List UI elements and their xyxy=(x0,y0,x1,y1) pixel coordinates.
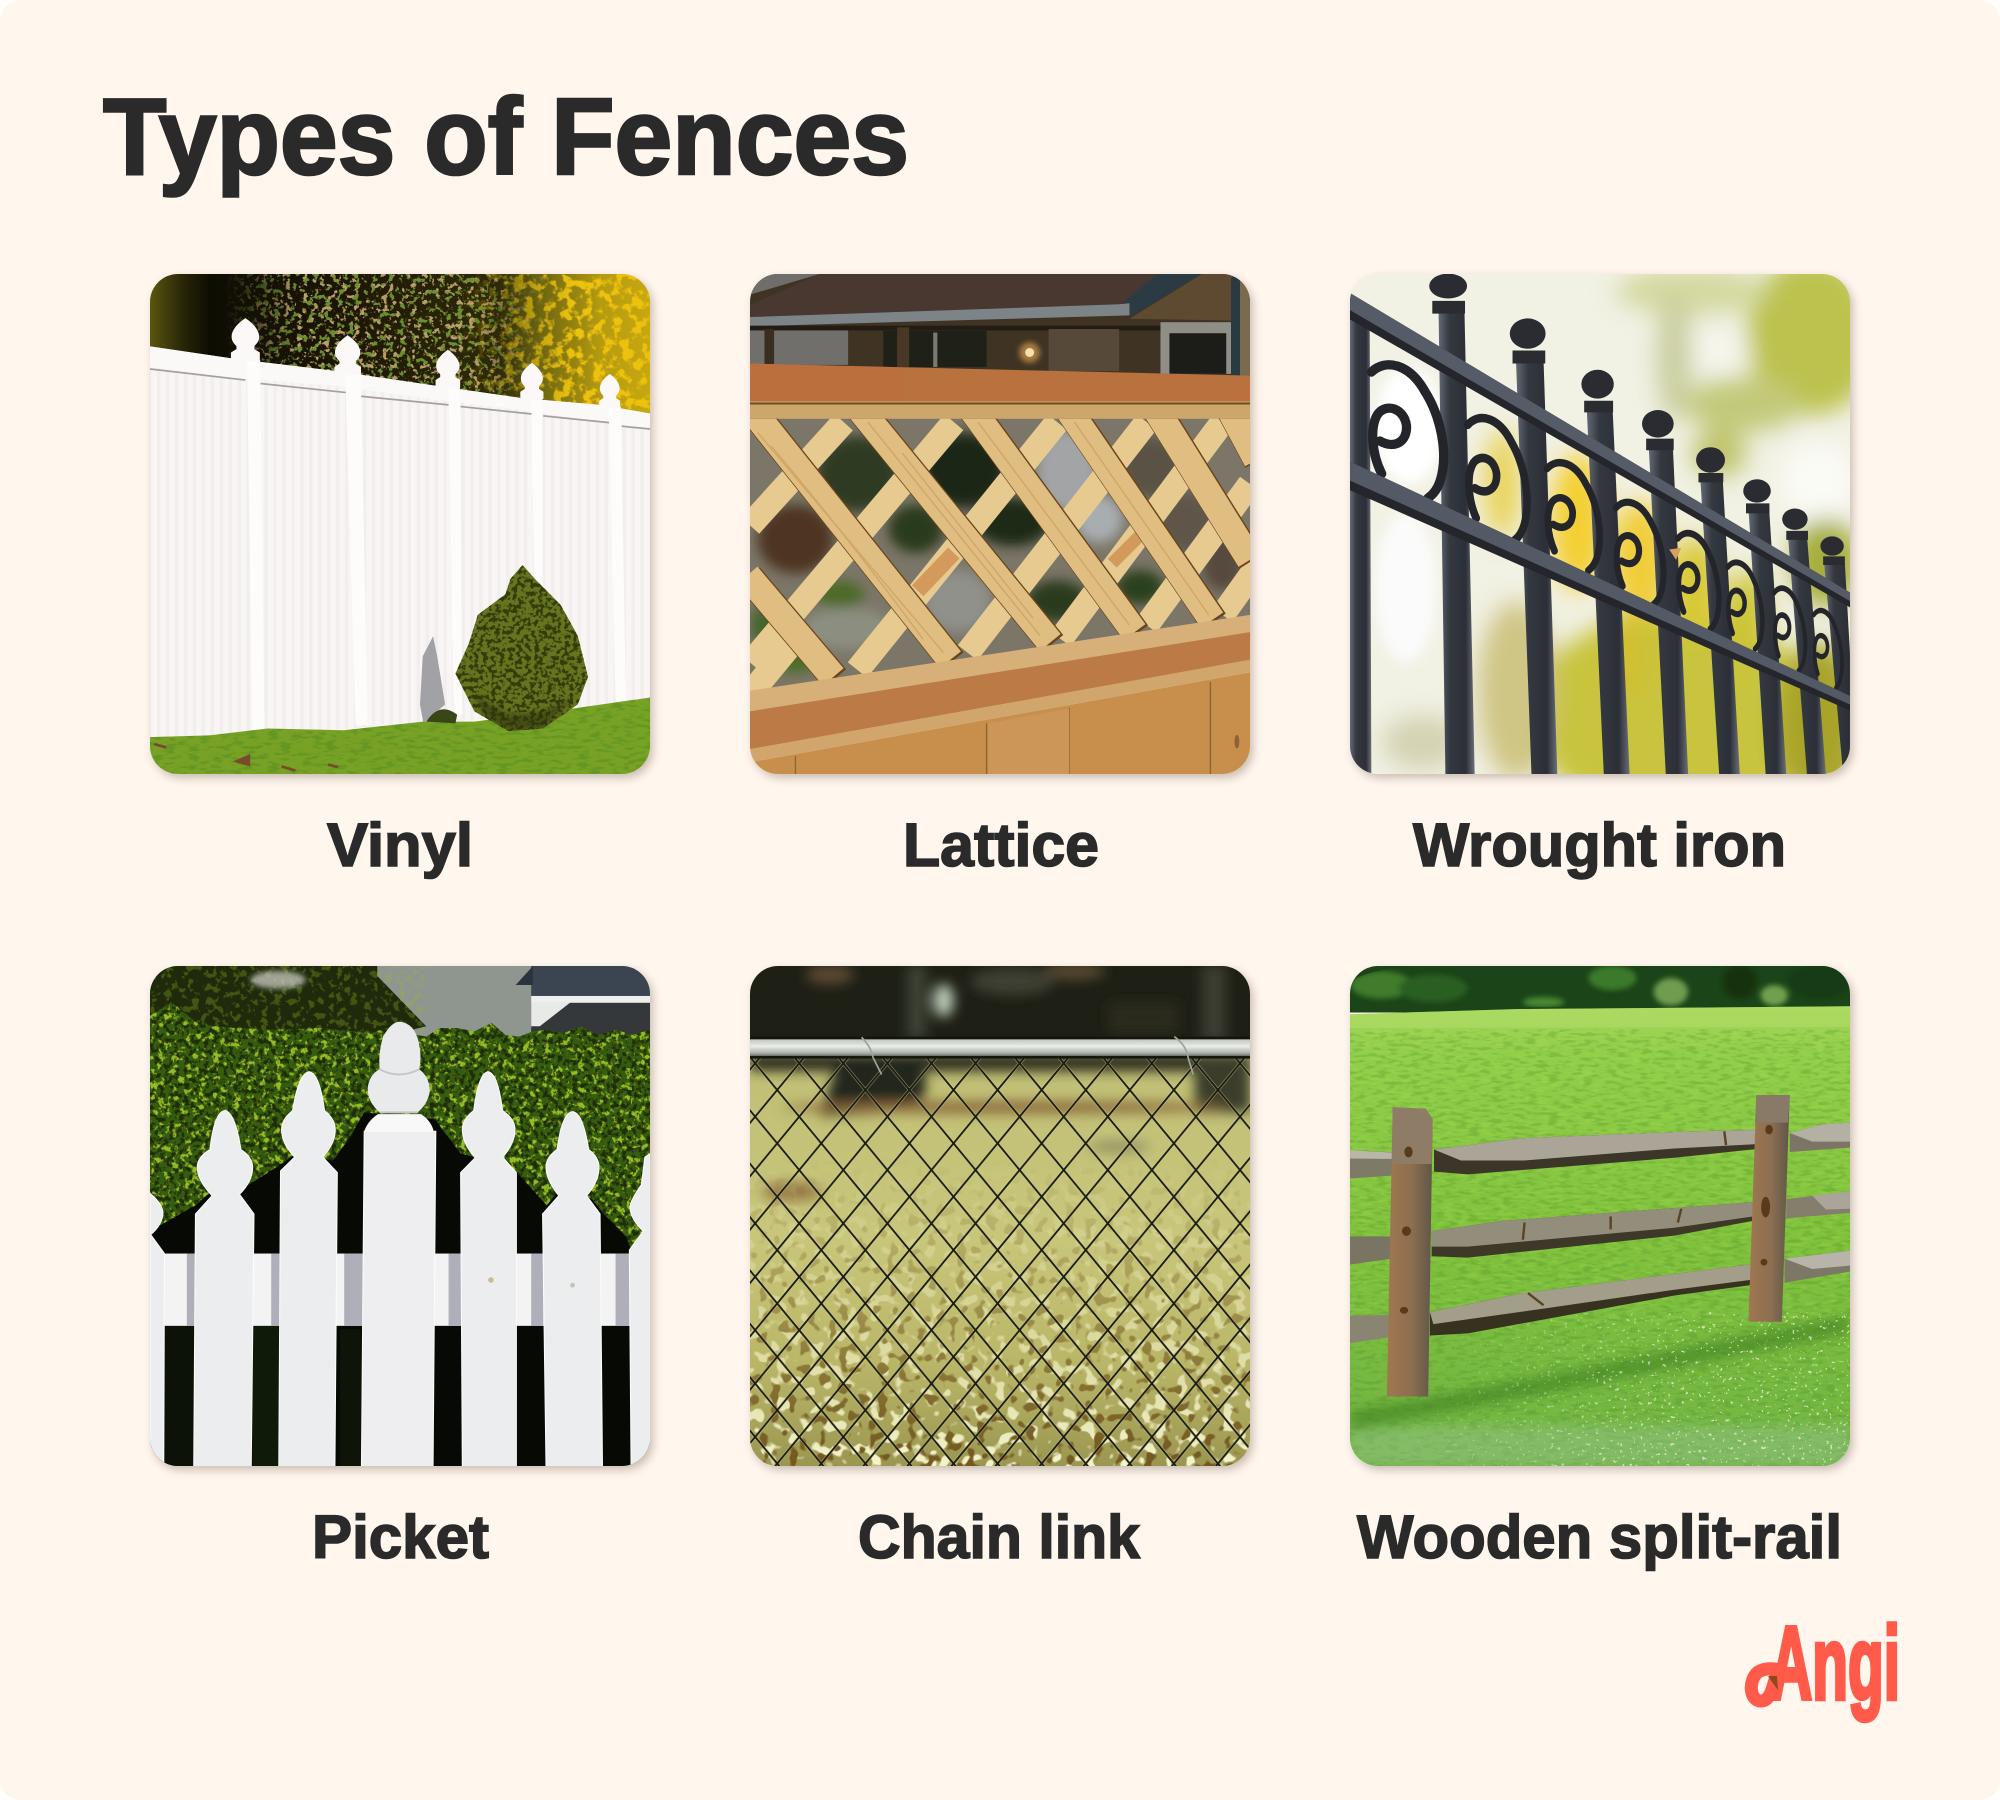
photo: white picket fence xyxy=(150,966,650,1466)
panel: picket fence xyxy=(148,965,658,1571)
label: Lattice: Lattice xyxy=(903,811,1099,879)
photo: white vinyl privacy fence xyxy=(150,274,650,774)
panel: lattice fence xyxy=(748,273,1258,879)
label: Picket: Picket xyxy=(312,1503,489,1571)
label: Vinyl: Vinyl xyxy=(327,811,473,879)
panel: vinyl fence xyxy=(148,273,658,880)
label: Wooden split-rail: Wooden split-rail xyxy=(1357,1503,1842,1571)
panel: wooden split-rail fence xyxy=(1348,965,1858,1572)
photo: wrought iron fence xyxy=(1350,274,1850,774)
panel: wrought iron fence xyxy=(1348,273,1858,880)
photo: chain link fence xyxy=(750,966,1250,1466)
panel: chain link fence xyxy=(748,965,1258,1571)
label: Wrought iron: Wrought iron xyxy=(1413,811,1786,879)
photo: wooden split-rail fence xyxy=(1350,966,1850,1466)
title: Types of Fences xyxy=(103,76,909,198)
label: Chain link: Chain link xyxy=(858,1503,1140,1571)
photo: wooden lattice fence xyxy=(750,274,1250,774)
